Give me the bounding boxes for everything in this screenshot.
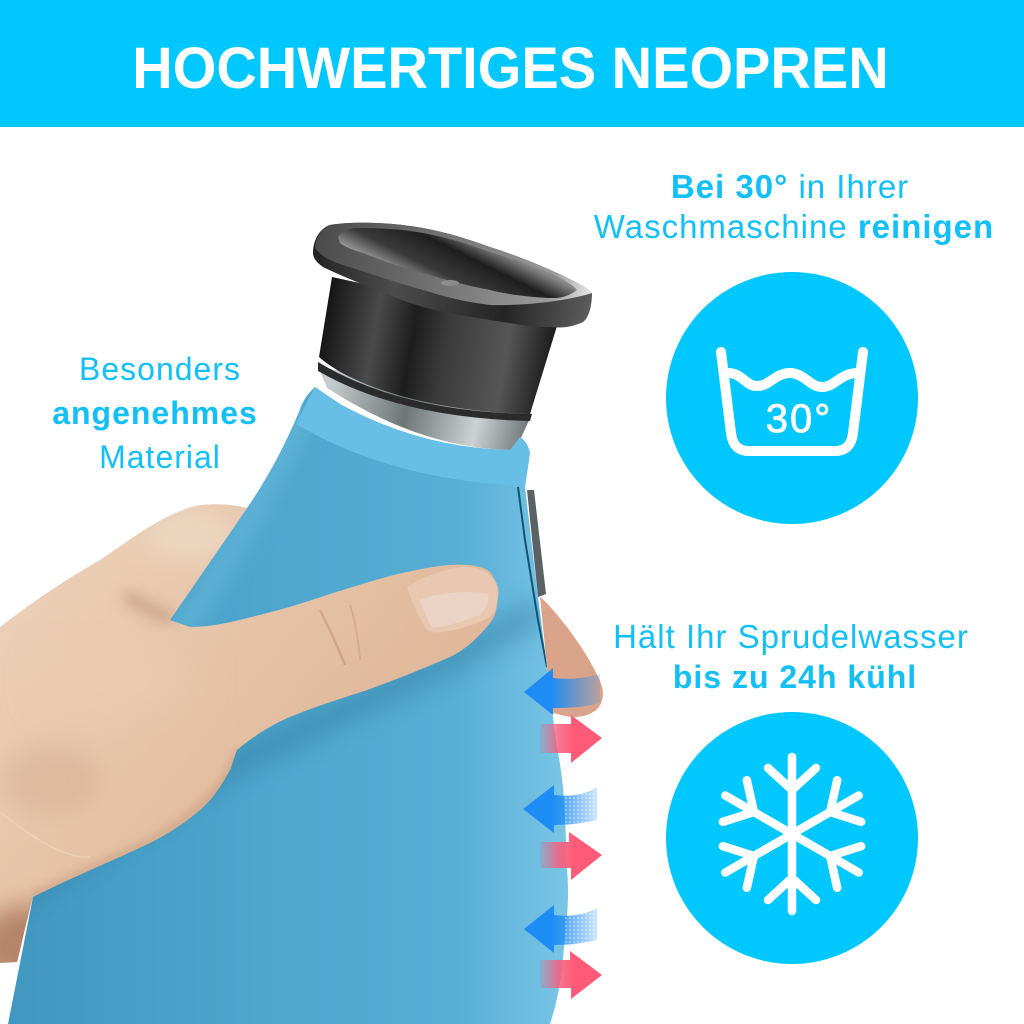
icon: wash basin xyxy=(666,272,918,524)
blue arrow 3 xyxy=(524,905,597,953)
text: washing xyxy=(594,168,994,245)
cap rim xyxy=(313,223,592,327)
text: material: Material xyxy=(99,439,221,475)
text: washing: Waschmaschine reinigen xyxy=(594,208,994,245)
red arrow 3 xyxy=(540,951,602,999)
icon: snowflake xyxy=(666,712,918,964)
text: cooling: bis zu 24h kühl xyxy=(673,659,917,695)
sleeve collar xyxy=(296,387,535,486)
thumbnail xyxy=(407,567,498,632)
neoprene sleeve xyxy=(0,380,600,1024)
glass neck xyxy=(318,366,532,450)
bottle xyxy=(0,223,600,1024)
text: material: angenehmes xyxy=(52,395,258,431)
text: washing: Bei 30° in Ihrer xyxy=(671,168,909,205)
black cap body xyxy=(319,277,557,414)
header banner xyxy=(0,0,1024,127)
bottle and hand illustration xyxy=(0,222,603,1024)
title: HOCHWERTIGES NEOPREN xyxy=(132,36,889,101)
back fingertip xyxy=(540,597,603,717)
text: material xyxy=(52,351,258,475)
hand xyxy=(0,504,603,985)
seam line xyxy=(518,487,547,667)
rim lip xyxy=(315,223,592,305)
icon: wash basin: 30° xyxy=(766,397,832,441)
cap recess xyxy=(338,228,577,298)
text: material: Besonders xyxy=(79,351,241,387)
red arrow 1 xyxy=(540,715,602,763)
text: cooling xyxy=(613,618,969,695)
blue arrow 1 xyxy=(524,668,600,715)
hand shading xyxy=(0,510,360,985)
blue arrow 2 xyxy=(523,785,597,833)
side clasp xyxy=(527,490,546,597)
vent hole xyxy=(441,280,459,286)
temperature arrows xyxy=(523,668,602,999)
palm and thumb xyxy=(0,504,498,963)
blue arrow 3 texture xyxy=(564,908,597,945)
text: cooling: Hält Ihr Sprudelwasser xyxy=(613,618,969,655)
dark seal ring xyxy=(318,362,532,421)
blue arrow 2 texture xyxy=(564,787,597,825)
red arrow 2 xyxy=(540,832,602,880)
nail bed xyxy=(420,592,488,628)
